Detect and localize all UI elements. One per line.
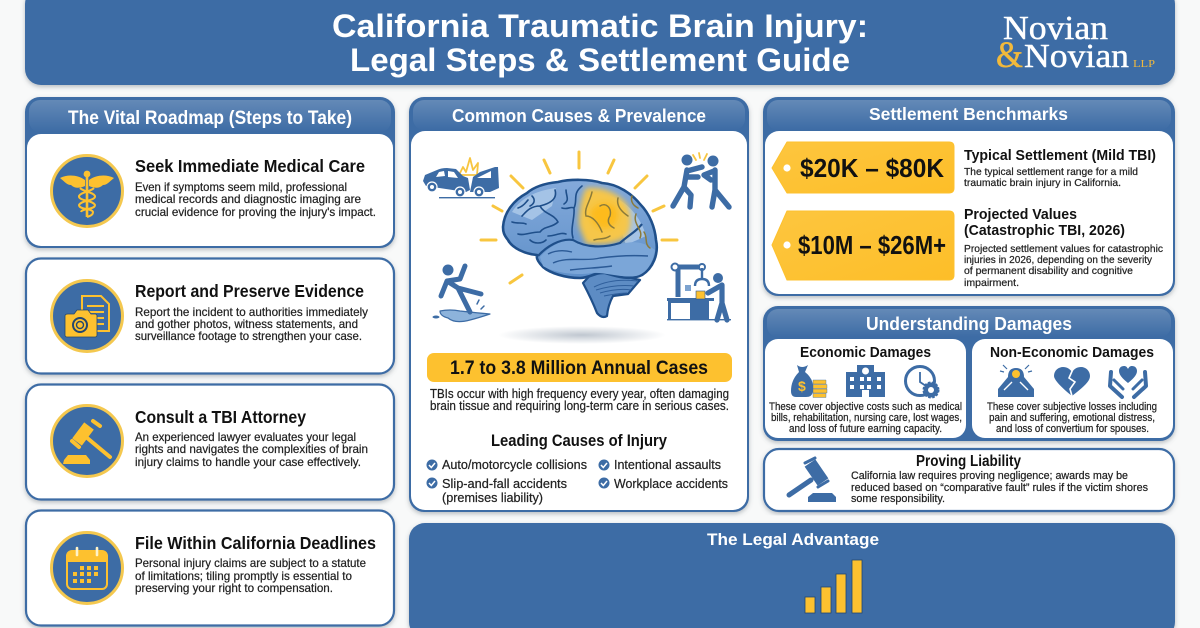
stat banner: annual cases: [427, 353, 732, 382]
bar chart: [805, 560, 862, 613]
step text: Personal injury claims are subject to a statute: [135, 556, 366, 570]
projected values text: injuries in 2026, depending on the severity: [964, 254, 1153, 266]
heading: roadmap: The Vital Roadmap (Steps to Take): [68, 107, 352, 129]
brain illustration: [481, 152, 677, 344]
projected values text: (Catastrophic TBI, 2026): [964, 222, 1125, 239]
icon: camera and document: [52, 280, 122, 352]
icon: workplace accident: [667, 264, 731, 320]
logo: Novian & Novian LLP: Novian: [1024, 38, 1129, 75]
causes checklist: Intentional assaults: [614, 458, 721, 472]
causes checklist: [426, 458, 728, 505]
icon: car crash: [423, 158, 499, 198]
step text: surveillance footage to strengthen your case.: [135, 329, 362, 343]
icon: caduceus: [52, 156, 122, 226]
subheading: leading causes: Leading Causes of Injury: [491, 432, 668, 450]
panel: the legal advantage: [409, 523, 1175, 628]
icon: hospital building: [846, 365, 885, 397]
stat banner: annual cases: 1.7 to 3.8 Million Annual Cases: [450, 357, 708, 379]
panel: settlement benchmarks: [763, 97, 1175, 296]
icon: calendar: [52, 532, 122, 604]
typical settlement text: The typical settlement range for a mild: [964, 166, 1138, 178]
step 1: medical care: [52, 156, 376, 226]
icon: money bag and coins: [791, 365, 827, 398]
non-economic damages text: [987, 401, 1157, 435]
icon: gavel: [52, 406, 122, 476]
typical settlement text: [964, 147, 1156, 189]
causes checklist: Slip-and-fall accidents: [442, 477, 567, 491]
non-economic damages text: pain and suffering, emotional distress,: [989, 412, 1155, 424]
economic damages text: [769, 401, 962, 435]
causes checklist: Workplace accidents: [614, 477, 728, 491]
step text: rights and navigates the complexities of brain: [135, 442, 368, 456]
icon: head in pain: [998, 365, 1034, 397]
logo: Novian & Novian LLP: [996, 10, 1155, 76]
projected values text: Projected settlement values for catastrophic: [964, 243, 1163, 255]
card: non-economic damages: Non-Economic Damages: [990, 345, 1154, 361]
projected values text: impairment.: [964, 277, 1019, 289]
liability text: some responsibility.: [851, 493, 945, 505]
logo: Novian & Novian LLP: Novian: [1003, 10, 1108, 47]
typical settlement text: Typical Settlement (Mild TBI): [964, 147, 1156, 164]
step title: Consult a TBI Attorney: [135, 407, 306, 427]
price tag: mild TBI: [772, 142, 954, 193]
icon: assault: [673, 153, 729, 207]
prevalence text: brain tissue and requiring long-term care in serious cases.: [430, 399, 729, 413]
step text: [135, 180, 376, 219]
step title: Report and Preserve Evidence: [135, 281, 364, 301]
step text: Even if symptoms seem mild, professional: [135, 180, 347, 194]
step 2: preserve evidence: [26, 258, 394, 374]
non-economic damages text: These cover subjective losses including: [987, 401, 1157, 413]
step text: [135, 556, 366, 595]
cerebellum and stem: [583, 270, 640, 317]
heading: liability: Proving Liability: [916, 453, 1021, 470]
step 3: consult attorney: [26, 384, 394, 500]
heading: causes: Common Causes & Prevalence: [452, 106, 706, 126]
typical settlement text: traumatic brain injury in California.: [964, 177, 1121, 189]
step text: [135, 430, 368, 469]
liability text: reduced based on “comparative fault” rules if the victim shores: [851, 482, 1148, 494]
price tag: catastrophic TBI: [772, 211, 954, 280]
heading: damages: Understanding Damages: [866, 313, 1072, 334]
step text: and gother photos, witness statements, and: [135, 317, 358, 331]
title: [332, 8, 868, 78]
heading: settlement: Settlement Benchmarks: [869, 104, 1068, 124]
panel: proving liability: [764, 449, 1174, 511]
title: California Traumatic Brain Injury:: [332, 8, 868, 44]
icon: money bag and coins: $: [798, 378, 806, 394]
logo: Novian & Novian LLP: &: [996, 35, 1023, 76]
step text: medical records and diagnostic imaging are: [135, 192, 361, 206]
projected values text: of permanent disability and cognitive: [964, 265, 1133, 277]
step 4: file within deadlines: [26, 510, 394, 626]
step text: preserving your right to compensation.: [135, 581, 333, 595]
step text: crucial evidence for proving the injury's impact.: [135, 205, 376, 219]
non-economic damages text: and loss of convertium for spouses.: [996, 423, 1149, 435]
panel: common causes and prevalence: [409, 97, 749, 512]
cerebrum: [503, 180, 657, 278]
panel: vital roadmap: [25, 97, 395, 248]
icon: caring hands and heart: [1110, 366, 1146, 397]
projected values text: Projected Values: [964, 206, 1077, 223]
step text: injury claims to handle your case effectively.: [135, 455, 361, 469]
economic damages text: These cover objective costs such as medical: [769, 401, 962, 413]
liability text: [851, 470, 1148, 505]
panel: understanding damages: [763, 306, 1175, 441]
card: non-economic damages: [972, 339, 1173, 438]
prevalence text: [430, 387, 729, 413]
price tag: mild TBI: $20K – $80K: [800, 153, 944, 183]
card: economic damages: Economic Damages: [800, 345, 931, 361]
step text: Report the incident to authorities immediately: [135, 305, 368, 319]
economic damages text: bills, rehabilitation, nursing care, lost wages,: [771, 412, 962, 424]
step title: Seek Immediate Medical Care: [135, 156, 365, 176]
icon: slip and fall: [432, 264, 490, 322]
prevalence text: TBIs occur with high frequency every year, often damaging: [430, 387, 729, 401]
causes checklist: Auto/motorcycle collisions: [442, 458, 587, 472]
liability text: California law requires proving negligence; awards may be: [851, 470, 1128, 482]
card: economic damages: [765, 339, 966, 438]
heading: legal advantage: The Legal Advantage: [707, 530, 879, 549]
icon: blue gavel: [789, 458, 836, 502]
logo: Novian & Novian LLP: LLP: [1133, 59, 1155, 70]
title: Legal Steps & Settlement Guide: [350, 42, 850, 78]
rays: [481, 152, 677, 283]
icon: broken heart: [1054, 367, 1090, 396]
causes checklist: (premises liability): [442, 491, 543, 505]
step text: of limitations; tiling promptly is essential to: [135, 569, 352, 583]
icon: clock and gear: [906, 366, 938, 398]
price tag: catastrophic TBI: $10M – $26M+: [798, 230, 946, 260]
header banner: [25, 0, 1175, 85]
step text: [135, 305, 368, 343]
projected values text: [964, 206, 1163, 289]
step title: File Within California Deadlines: [135, 533, 376, 553]
step text: An experienced lawyer evaluates your legal: [135, 430, 356, 444]
economic damages text: and loss of future earning capacity.: [789, 423, 942, 435]
